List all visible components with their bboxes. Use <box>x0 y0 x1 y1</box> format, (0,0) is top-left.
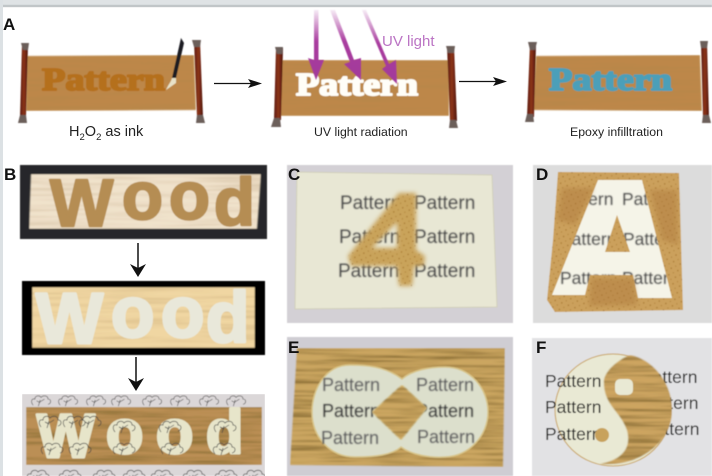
pattern text rows <box>338 193 475 282</box>
pattern text blue: Pattern <box>549 61 672 97</box>
label F: F <box>536 338 546 357</box>
photo: wood with dark word: Wood <box>50 159 255 241</box>
centre wood diamond <box>372 385 427 440</box>
pattern text rows: Pattern <box>340 193 401 214</box>
label B: B <box>4 165 16 184</box>
pattern text rows: Pattern <box>338 261 399 282</box>
pattern text rows <box>321 375 475 448</box>
label A: A <box>3 15 15 34</box>
pattern text rows: Pattern <box>641 367 697 387</box>
pattern text rows: Pattern <box>623 229 679 249</box>
pattern text rows: Pattern <box>414 261 475 282</box>
letter A stencil <box>547 172 683 312</box>
UV light label: UV light <box>382 33 435 50</box>
pattern text rows: Pattern <box>545 397 601 417</box>
arrow to epoxy step <box>459 77 507 86</box>
label C: C <box>288 165 300 184</box>
caption: UV light radiation: UV light radiation <box>314 125 408 139</box>
scroll: H2O2 ink <box>18 38 205 123</box>
arrow down 1 <box>130 243 146 277</box>
pattern text rows: Pattern <box>642 393 698 413</box>
pattern text rows: Pattern <box>557 189 613 209</box>
label D: D <box>536 165 548 184</box>
pattern text rows: Pattern <box>416 375 474 395</box>
panel D: letter A film <box>533 165 712 323</box>
pattern text rows: Pattern <box>622 268 678 288</box>
caption: H2O2 as ink: O <box>85 124 96 140</box>
scroll: UV radiation <box>271 46 458 128</box>
photo: wood with white word: Wood <box>36 274 249 359</box>
arrow down 2 <box>128 357 144 391</box>
caption: H2O2 as ink: as ink <box>101 124 144 140</box>
transparent lobes <box>312 365 488 457</box>
pattern text rows: Pattern <box>417 427 475 447</box>
panel C: numeral 4 film <box>287 165 513 323</box>
pattern text rows: Pattern <box>321 428 379 448</box>
eye dots <box>595 379 633 442</box>
pattern text rows: Pattern <box>322 375 380 395</box>
numeral 4 <box>348 193 425 286</box>
panel E: two-lobe wood pattern <box>287 337 513 476</box>
arrow to UV step <box>214 79 262 88</box>
label E: E <box>288 338 299 357</box>
tree outlines <box>27 396 265 476</box>
wood half <box>600 355 672 464</box>
pattern text rows: Pattern <box>560 268 616 288</box>
pattern text rows: Pattern <box>414 193 475 214</box>
pattern text rows: Pattern <box>560 229 616 249</box>
pattern text white: Pattern <box>296 66 418 102</box>
caption: Epoxy infilltration: Epoxy infilltration <box>570 125 663 139</box>
pattern text rows: Pattern <box>643 419 699 439</box>
icon: brush <box>166 38 184 90</box>
pale half <box>555 354 671 466</box>
UV light arrows <box>308 10 397 84</box>
pattern text rows: Pattern <box>339 227 400 248</box>
scroll: epoxy infiltration <box>525 41 711 123</box>
pattern text rows: Pattern <box>322 401 380 421</box>
pattern text rows <box>545 367 699 444</box>
pattern text rows <box>557 189 679 288</box>
pattern text rows: Pattern <box>414 227 475 248</box>
pattern text rows: Pattern <box>545 424 601 444</box>
photo: translucent wood over trees: Wood <box>37 398 243 470</box>
pattern text rows: Pattern <box>622 189 678 209</box>
panel F: yin-yang pattern <box>532 338 712 476</box>
caption: H2O2 as ink: 2 <box>79 132 85 143</box>
caption: H2O2 as ink: H <box>69 124 79 140</box>
pattern text rows: Pattern <box>416 401 474 421</box>
pattern text brown: Pattern <box>42 61 165 97</box>
caption: H2O2 as ink: 2 <box>96 132 101 143</box>
pattern text rows: Pattern <box>545 371 601 391</box>
